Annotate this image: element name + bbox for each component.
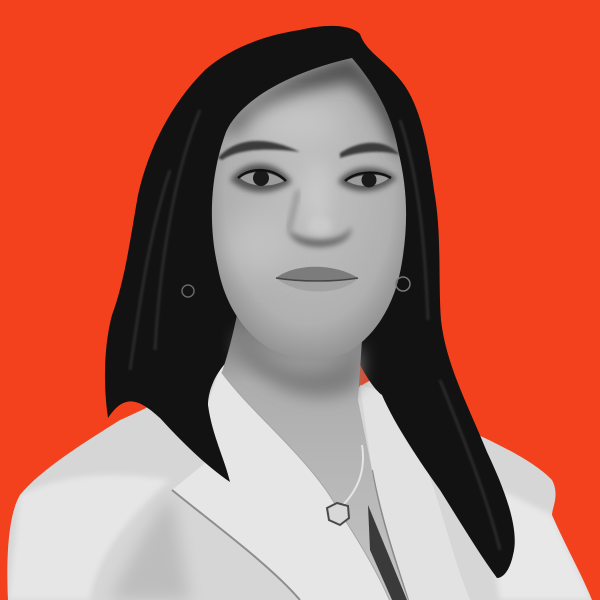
lips: [276, 267, 358, 292]
right eye: [338, 168, 397, 191]
jacket: right lapel: [360, 385, 470, 600]
hair highlights: [130, 110, 500, 550]
jacket: [7, 362, 592, 600]
right eyebrow: [340, 143, 400, 158]
face: [212, 58, 406, 359]
dark blouse sliver: [368, 505, 407, 600]
left eyebrow: [218, 141, 300, 160]
necklace: [327, 445, 363, 525]
neck and chest: [222, 310, 408, 600]
right earring: [396, 277, 410, 291]
hair: [105, 26, 515, 578]
left earring: [182, 285, 194, 297]
jacket: left lapel: [172, 362, 392, 600]
left eye: [230, 164, 292, 192]
nose: [288, 190, 351, 247]
face shading: [224, 58, 400, 270]
